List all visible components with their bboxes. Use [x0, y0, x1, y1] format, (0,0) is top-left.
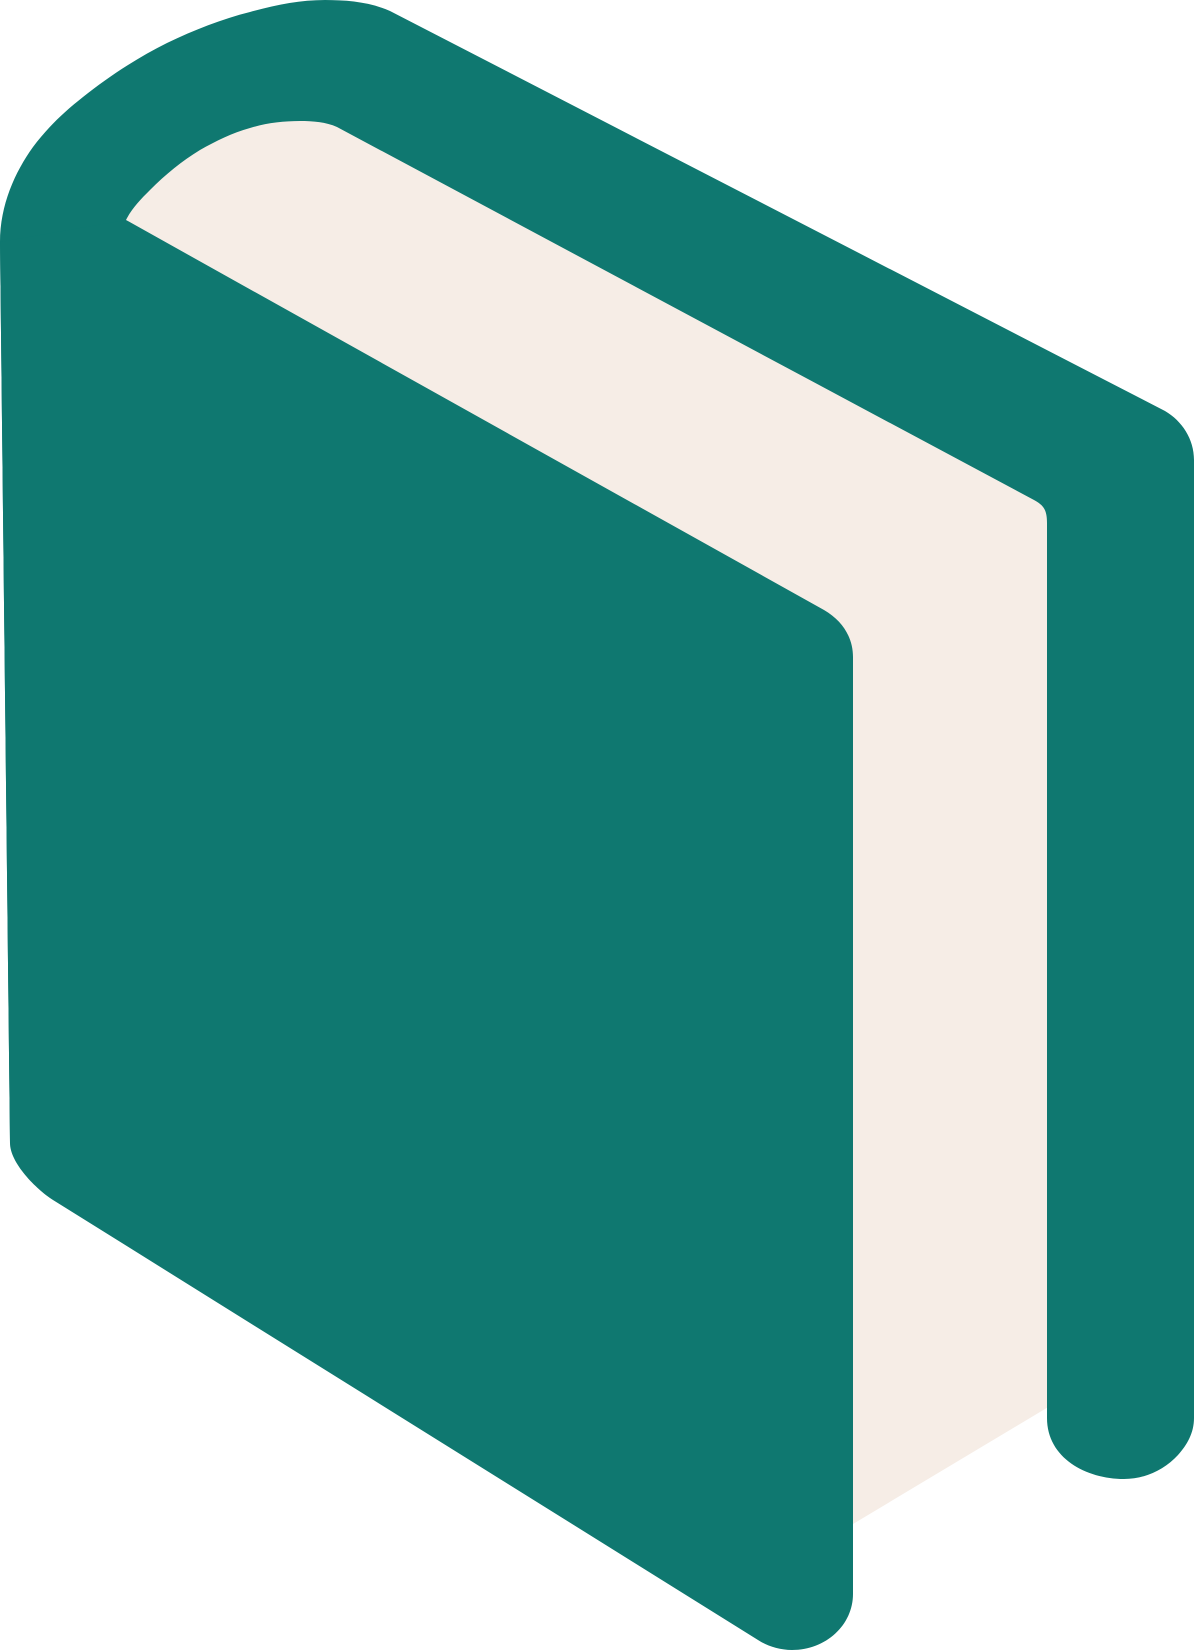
book front cover [0, 220, 853, 1650]
book pages [120, 100, 1060, 1524]
